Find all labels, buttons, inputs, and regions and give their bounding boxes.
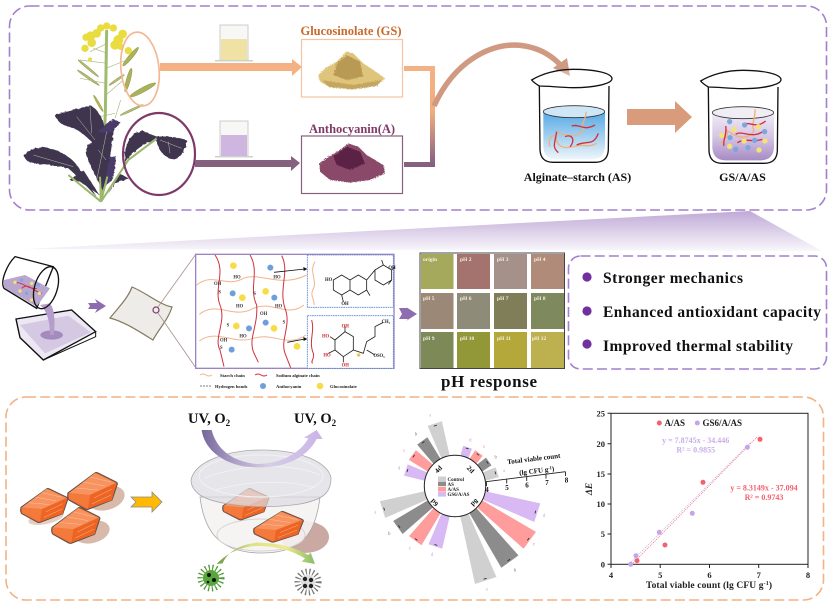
axis numbers: 4 bbox=[485, 486, 489, 494]
panel: pH colour response grid: pH 7 bbox=[497, 296, 509, 302]
anthocyanin dots bbox=[229, 265, 277, 353]
axis numbers: 5 bbox=[505, 484, 509, 492]
equation: A/AS: R² = 0.9743 bbox=[745, 493, 783, 502]
panel: pH colour response grid bbox=[420, 253, 564, 368]
day labels: 4d bbox=[433, 464, 444, 475]
x tick labels: 8 bbox=[806, 570, 810, 580]
legend: AS bbox=[448, 483, 454, 488]
significance letters: a bbox=[429, 414, 431, 419]
icon: yellow powder bbox=[318, 52, 385, 89]
y tick labels: 0 bbox=[601, 560, 605, 570]
panel: pH colour response grid: pH 11 bbox=[497, 336, 511, 342]
x axis title: Total viable count (lg CFU g bbox=[646, 581, 764, 591]
icon: beaker of purple extract bbox=[215, 121, 253, 158]
panel: pH colour response grid: pH 3 bbox=[497, 257, 509, 263]
significance letters: c bbox=[403, 449, 405, 454]
day labels bbox=[429, 464, 480, 508]
day labels: 2d bbox=[465, 464, 476, 475]
heading: pH response: pH response bbox=[441, 372, 537, 391]
equation: GS6/A/AS bbox=[662, 436, 729, 455]
illustration: container wrapped with film bbox=[191, 450, 331, 553]
significance letters: b bbox=[495, 455, 498, 460]
arrow: curved into alginate-starch beaker bbox=[434, 45, 570, 106]
label: UV, O2 incoming: 2 bbox=[226, 418, 231, 428]
axis unit: ) bbox=[551, 465, 555, 473]
plot frame bbox=[611, 413, 808, 564]
axis numbers: 6 bbox=[525, 482, 529, 490]
bond labels: S bbox=[253, 292, 256, 297]
significance letters: b bbox=[514, 569, 517, 574]
tilted beaker bbox=[3, 257, 63, 312]
arrow: UV and oxygen deflected bbox=[202, 430, 323, 467]
significance letters: d bbox=[469, 438, 472, 443]
arrow: to GS/A/AS beaker bbox=[627, 101, 692, 133]
bond labels: S bbox=[220, 346, 223, 351]
day labels: 6d bbox=[429, 497, 440, 508]
bond labels: OH bbox=[260, 312, 268, 317]
illustration: purple cabbage plant bbox=[24, 22, 187, 202]
y tick labels: 20 bbox=[596, 439, 605, 449]
bond labels: HO bbox=[273, 275, 281, 280]
label: UV, O2 blocked: UV, O bbox=[294, 411, 332, 427]
panel: anthocyanin powder bbox=[302, 136, 402, 194]
chart: radial bar of total viable count bbox=[374, 414, 569, 593]
bond labels: OH bbox=[220, 339, 228, 344]
panel: pH colour response grid: pH 6 bbox=[460, 296, 472, 302]
casting dish bbox=[16, 310, 96, 360]
arrow: network to pH response bbox=[399, 307, 417, 321]
y axis title: ΔE bbox=[585, 483, 595, 496]
y tick labels: 10 bbox=[596, 499, 605, 509]
glucosinolate dots bbox=[230, 262, 300, 350]
bond labels: HO bbox=[275, 305, 283, 310]
inset: glucosinolate structure: OH bbox=[342, 363, 349, 368]
y tick labels: 15 bbox=[596, 469, 605, 479]
bond labels: HO bbox=[233, 275, 241, 280]
connector: powders merge bbox=[404, 68, 432, 164]
axis title: Total viable count bbox=[507, 452, 561, 466]
label: alginate-starch: Alginate–starch (AS) bbox=[524, 170, 631, 184]
arrow: bacteria inhibition bbox=[217, 543, 315, 564]
panel: pH colour response grid: pH 9 bbox=[423, 336, 435, 342]
panel: pH colour response grid: pH 5 bbox=[423, 296, 435, 302]
significance letters: d bbox=[543, 514, 546, 519]
inset: glucosinolate structure bbox=[307, 316, 393, 368]
legend: network symbols: Sodium alginate chain bbox=[276, 373, 320, 378]
benefit: stronger mechanics: Stronger mechanics bbox=[603, 270, 743, 287]
stem bbox=[101, 30, 107, 200]
axis unit: -1 bbox=[548, 465, 553, 471]
panel: pH colour response grid: pH 8 bbox=[534, 296, 546, 302]
trend lines bbox=[633, 437, 757, 563]
icon: dead bacterium bbox=[298, 572, 318, 592]
x tick labels: 4 bbox=[609, 570, 614, 580]
beaker: GS/A/AS bbox=[701, 70, 781, 163]
illustration: pouring film solution bbox=[3, 257, 96, 360]
callout ring: seeds bbox=[117, 30, 163, 108]
beaker: alginate-starch bbox=[532, 69, 612, 162]
panel: salmon preservation application bbox=[6, 397, 824, 600]
panel: pH colour response grid: origin bbox=[423, 257, 437, 263]
alginate chains bbox=[215, 255, 291, 368]
axis numbers: 7 bbox=[545, 479, 549, 487]
bars bbox=[380, 421, 540, 584]
inset: anthocyanin structure: OH bbox=[341, 302, 349, 307]
label: GS/A/AS: GS/A/AS bbox=[719, 170, 766, 184]
panel: pH colour response grid: pH 2 bbox=[460, 257, 472, 263]
panel: pH colour response grid: pH 10 bbox=[460, 336, 474, 342]
significance letters: c bbox=[533, 543, 535, 548]
bond labels: HO bbox=[239, 335, 247, 340]
panel: extraction and film formation bbox=[10, 6, 826, 210]
panel: pH colour response grid: pH 12 bbox=[532, 336, 546, 342]
y tick labels: 5 bbox=[601, 529, 605, 539]
legend: Control bbox=[448, 478, 465, 483]
legend: network symbols: Hydrogen bonds bbox=[215, 384, 248, 389]
callout ring: leaf bbox=[123, 113, 195, 195]
significance letters bbox=[374, 414, 546, 593]
GS6/A/AS points bbox=[628, 445, 750, 567]
pods bbox=[77, 46, 157, 116]
zoom wedge: top panel to film detail bbox=[25, 211, 822, 251]
inset: glucosinolate structure: HO bbox=[323, 353, 331, 358]
inset: anthocyanin structure bbox=[307, 255, 396, 307]
panel: film benefits bbox=[568, 256, 826, 369]
significance letters: b bbox=[388, 532, 391, 537]
bond labels: S bbox=[227, 324, 230, 329]
A/AS points bbox=[634, 437, 762, 563]
axis numbers: 8 bbox=[565, 476, 569, 484]
heading: Glucosinolate: Glucosinolate (GS) bbox=[300, 24, 402, 38]
legend: network symbols bbox=[200, 373, 357, 389]
axis numbers bbox=[485, 476, 569, 494]
inset: glucosinolate structure: OSO₃ bbox=[373, 354, 385, 359]
day labels: 8d bbox=[469, 497, 480, 508]
equation: GS6/A/AS: y = 7.8745x - 34.446 bbox=[662, 436, 729, 445]
arrow: salmon to packaging bbox=[131, 492, 162, 512]
equation: A/AS bbox=[730, 484, 798, 502]
icon: purple powder bbox=[319, 143, 385, 183]
x tick labels: 7 bbox=[757, 570, 762, 580]
benefit: thermal stability: Improved thermal stability bbox=[603, 338, 793, 355]
illustration: raw salmon pieces bbox=[21, 472, 127, 547]
bond labels: OH bbox=[214, 282, 222, 287]
inset: anthocyanin structure: OH bbox=[388, 266, 396, 271]
arrow: casting to film bbox=[88, 299, 106, 313]
significance letters: a bbox=[374, 511, 376, 516]
x tick labels bbox=[609, 570, 810, 580]
bond labels: S bbox=[283, 320, 286, 325]
inset: glucosinolate structure: HO bbox=[322, 335, 330, 340]
x tick labels: 5 bbox=[658, 570, 662, 580]
icon: live bacterium bbox=[200, 568, 222, 588]
equation: A/AS: y = 8.3149x - 37.094 bbox=[730, 484, 798, 493]
chart: colour change vs viable count scatter bbox=[585, 408, 810, 591]
legend: GS6/A/AS bbox=[448, 493, 470, 498]
significance letters: d bbox=[398, 467, 401, 472]
inner ring bbox=[424, 455, 486, 517]
value axis bbox=[486, 472, 566, 486]
significance letters: c bbox=[409, 546, 411, 551]
legend: network symbols: Anthocyanin bbox=[276, 384, 302, 389]
panel: hydrogen-bond network bbox=[196, 254, 396, 368]
legend: network symbols: Glucosinolate bbox=[330, 384, 357, 389]
flowers bbox=[81, 22, 132, 61]
bond labels: S bbox=[218, 290, 221, 295]
legend: A/AS bbox=[664, 418, 685, 428]
icon: beaker of yellow extract bbox=[215, 25, 253, 62]
y tick labels bbox=[596, 408, 605, 570]
significance letters: a bbox=[503, 469, 505, 474]
benefit: antioxidant capacity: Enhanced antioxidant capacity bbox=[603, 304, 821, 321]
significance letters: d bbox=[431, 553, 434, 558]
icon: film sheet bbox=[110, 287, 172, 340]
x axis title: ) bbox=[769, 580, 772, 591]
x axis title: -1 bbox=[764, 581, 769, 587]
significance letters: a bbox=[486, 588, 488, 593]
label: UV, O2 incoming: UV, O bbox=[188, 411, 226, 427]
significance letters: b bbox=[415, 432, 418, 437]
axis unit: (lg CFU g bbox=[519, 466, 549, 477]
bond labels: HO bbox=[236, 305, 244, 310]
y tick labels: 25 bbox=[596, 408, 605, 418]
leaves bbox=[24, 105, 187, 197]
equation: GS6/A/AS: R² = 0.9855 bbox=[676, 446, 715, 455]
bond labels bbox=[214, 275, 286, 351]
legend: GS6/A/AS bbox=[702, 418, 742, 428]
starch chains bbox=[197, 275, 307, 341]
inset: glucosinolate structure: CH₂ bbox=[382, 320, 391, 325]
significance letters: c bbox=[483, 445, 485, 450]
solution stream bbox=[40, 303, 55, 335]
panel: pH colour response grid: pH 4 bbox=[534, 257, 546, 263]
x tick labels: 6 bbox=[707, 570, 712, 580]
label: UV, O2 blocked: 2 bbox=[332, 418, 337, 428]
inset: glucosinolate structure: OH bbox=[342, 325, 349, 330]
inset: anthocyanin structure: HO bbox=[325, 278, 333, 283]
zoom lines: film to network bbox=[158, 254, 196, 368]
arrow: leaves to anthocyanin bbox=[195, 156, 300, 171]
legend bbox=[657, 418, 742, 428]
legend bbox=[438, 476, 470, 498]
pointer arrows bbox=[274, 269, 305, 342]
arrow: seeds to glucosinolate bbox=[160, 59, 302, 76]
panel: glucosinolate powder bbox=[302, 40, 402, 97]
legend: network symbols: Starch chain bbox=[220, 373, 245, 378]
legend: A/AS bbox=[448, 488, 459, 493]
heading: Anthocyanin: Anthocyanin(A) bbox=[309, 122, 395, 136]
